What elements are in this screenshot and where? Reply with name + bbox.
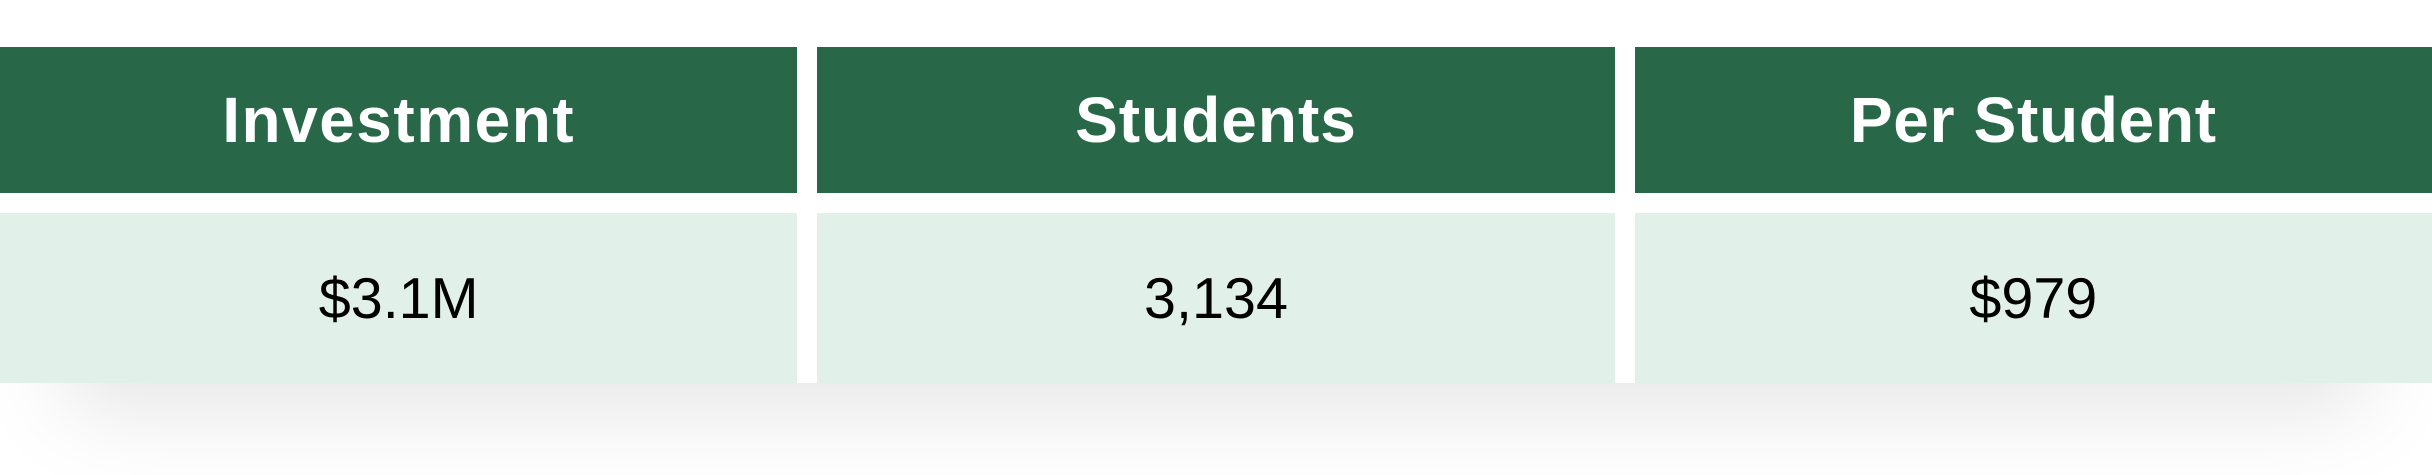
header cell: Students — [817, 47, 1615, 193]
value cell: investment amount — [0, 213, 797, 383]
header cell: Investment — [0, 47, 797, 193]
table shadow — [58, 220, 2374, 415]
value cell: student count — [817, 213, 1615, 383]
header cell: Investment: Investment — [222, 84, 575, 156]
header cell: Per Student: Per Student — [1850, 84, 2217, 156]
value cell: cost per student — [1635, 213, 2432, 383]
value cell: investment amount: $3.1M — [319, 267, 479, 331]
value cell: student count: 3,134 — [1144, 267, 1288, 331]
value cell: cost per student: $979 — [1969, 267, 2097, 331]
header cell: Per Student — [1635, 47, 2432, 193]
header cell: Students: Students — [1075, 84, 1357, 156]
